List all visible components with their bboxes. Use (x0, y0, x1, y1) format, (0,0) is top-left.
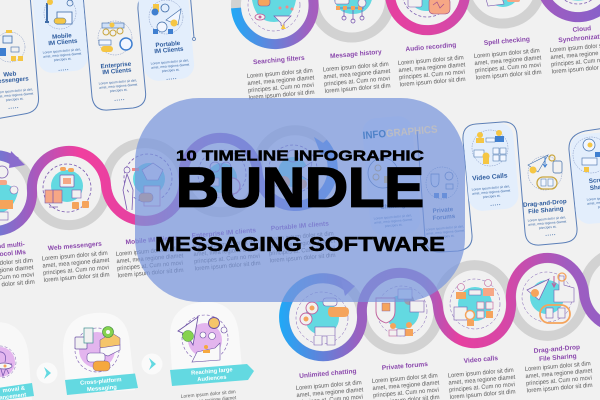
card text (471, 184, 511, 200)
heading: Chatting (380, 202, 406, 211)
icon: connector end dot (192, 38, 196, 40)
label: spam removal and enhancement (0, 383, 34, 400)
card: drag-and-drop file sharing (523, 155, 567, 237)
heading: Enterprise (100, 61, 132, 70)
label: drag-and-drop file sharing: amet, mea regione diamet (525, 367, 593, 380)
icon: web messengers (0, 30, 25, 62)
label: portable IM clients: Lorem ipsum dolor sit dim (268, 230, 334, 243)
card text: amet, mea regione diamet (99, 83, 138, 90)
card text (0, 87, 34, 103)
card text: amet, mea regione diamet (374, 218, 413, 225)
icon: drag-and-drop file sharing (528, 155, 562, 190)
heading: Portable (155, 40, 181, 49)
card text: amet, mea regione diamet (472, 189, 511, 196)
icon: spam removal (0, 346, 16, 378)
card text: principes at. (483, 194, 501, 199)
card: reaching large audiences (170, 302, 254, 400)
label: web messengers: principes at. Cum no movi (43, 264, 109, 277)
pagination dots: ••••• (58, 68, 69, 72)
heading: Video Calls (472, 172, 508, 183)
card text: Lorem ipsum dolor sit dim (181, 389, 236, 400)
icon: video calls (450, 279, 500, 329)
icon: cloud synchronization (553, 0, 600, 4)
label: spam removal and enhancement: moval & (2, 386, 25, 394)
pagination dots: ••••• (166, 77, 177, 81)
icon: private forums (376, 286, 427, 336)
subtitle: messaging software: MESSAGING SOFTWARE (155, 233, 445, 256)
icon: decentralized messengers (0, 166, 18, 220)
card text: Lorem ipsum dolor sit dim, (42, 47, 81, 55)
label: audio recording: principes at. Cum no movi (399, 69, 465, 81)
ribbon: bottom timeline (284, 258, 600, 356)
card: video calls (462, 122, 520, 212)
label: unlimited chatting: Unlimited chatting (299, 368, 357, 380)
label: mobile IM clients: principes at. Cum no movi (117, 260, 183, 272)
label: message history: lorem ipsum dolor sit dim (324, 82, 391, 95)
icon: unlimited chatting (368, 158, 398, 188)
icon: video calls (472, 130, 508, 166)
card text (425, 224, 465, 240)
label: unlimited chatting (296, 368, 364, 400)
label: video calls: amet, mea regione diamet (448, 374, 516, 387)
label: message history (323, 49, 392, 95)
icon: reaching large audiences (178, 315, 228, 362)
label: spell checking: Spell checking (484, 36, 530, 47)
card: unlimited chatting (361, 115, 421, 237)
card text: Lorem ipsum dolor sit dim, (527, 215, 566, 223)
label: unlimited chatting: Lorem ipsum dolor sit dim (296, 379, 362, 392)
icon: portable IM clients (149, 0, 183, 34)
label: searching filters: lorem ipsum dolor sit dim (248, 89, 315, 102)
label: reaching large audiences: Reaching large (191, 367, 234, 377)
label: web messengers: amet, mea regione diamet (42, 257, 110, 270)
card text: Lorem ipsum dolor sit dim, (471, 184, 510, 192)
label: drag-and-drop file sharing: File Sharing (539, 353, 577, 363)
label: web messengers: Web messengers (48, 241, 102, 252)
label: searching filters: Lorem ipsum dolor sit dim (247, 67, 313, 80)
label: spell checking (474, 36, 543, 82)
card text: principes at. (539, 225, 557, 230)
panel: bottom left arch cards (0, 302, 254, 400)
card text: amet, mea regione diamet (426, 229, 465, 236)
label: mobile IM clients: Mobile IM clients (125, 235, 179, 246)
label: drag-and-drop file sharing: principes at. Cum no movi (526, 375, 592, 387)
label: enterprise IM clients (191, 227, 262, 273)
label: message history: Message history (330, 49, 382, 60)
icon: unlimited chatting (296, 292, 349, 345)
card: mobile IM clients (31, 0, 89, 74)
arrow: next step circle 1 (36, 362, 58, 384)
card text: principes at. (110, 88, 128, 93)
card: private forums: Forums (432, 213, 456, 222)
label: private forums: Private forums (382, 361, 428, 372)
card: spam removal (0, 322, 34, 400)
label: cross-platform messaging: Cross-platform (80, 377, 122, 387)
label: cloud synchronization: Cloud (572, 25, 591, 34)
label: web messengers (42, 241, 111, 284)
icon: cross-platform messaging (75, 326, 120, 372)
card text: principes at. (54, 57, 72, 62)
icon: spell checking (484, 0, 520, 7)
label: mobile IM clients: lorem ipsum dolor sit dim (117, 267, 184, 280)
label: reaching large audiences: Audiences (197, 375, 227, 383)
heading: Web (3, 70, 17, 79)
card text (42, 47, 82, 63)
label: enterprise IM clients: amet, mea regione diamet (193, 245, 261, 258)
label: portable IM clients: lorem ipsum dolor sit dim (269, 252, 336, 265)
label: web messengers: lorem ipsum dolor sit dim (43, 271, 110, 284)
pagination dots: ••••• (8, 106, 19, 110)
icon: enterprise IM clients (98, 21, 132, 55)
card text: Lorem ipsum dolor sit dim, (98, 78, 137, 86)
label: spell checking: lorem ipsum dolor sit dim (475, 69, 542, 82)
outline: connector line top left (0, 0, 194, 120)
card text: principes at. (6, 97, 24, 102)
icon: message history (333, 0, 373, 23)
label: private forums (372, 361, 441, 400)
label: message history: amet, mea regione diamet (323, 68, 391, 81)
icon: mobile IM clients (44, 0, 76, 29)
card text (527, 215, 567, 231)
label: video calls: Lorem ipsum dolor sit dim (448, 367, 514, 379)
title: 10 timeline infographic: 10 TIMELINE INFOGRAPHIC (176, 148, 424, 164)
panel: central rounded blob (135, 98, 465, 302)
title: bundle: BUNDLE (176, 156, 424, 218)
icon: portable IM clients (269, 145, 317, 193)
label: portable IM clients: Portable IM clients (271, 220, 330, 233)
label: mobile IM clients: amet, mea regione diamet (116, 252, 184, 265)
label: searching filters: Searching filters (253, 55, 305, 66)
icon: screen sharing (573, 137, 600, 173)
panel: vertical card serpentine top left (0, 0, 196, 120)
label: private forums: principes at. Cum no movi (373, 387, 439, 399)
label: spell checking: Lorem ipsum dolor sit dim (474, 47, 540, 60)
card: portable IM clients: IM Clients (154, 46, 184, 55)
ribbon: top timeline (236, 0, 600, 44)
card: enterprise IM clients (98, 21, 138, 102)
card: web messengers (0, 30, 34, 110)
label: private forums: amet, mea regione diamet (372, 379, 440, 392)
arrow: middle timeline start (9, 151, 25, 168)
label: audio recording (398, 42, 467, 89)
label: decentralized multi-protocol IMs (0, 241, 35, 292)
panel: vertical cards right (361, 115, 600, 252)
arrow: next step circle 2 (142, 354, 162, 374)
label: enterprise IM clients: principes at. Cum no movi (194, 253, 260, 265)
card text: Lorem ipsum dolor sit dim, (150, 58, 189, 66)
label: portable IM clients: principes at. Cum no movi (269, 245, 335, 257)
card text: Lorem ipsum dolor sit dim, (425, 224, 464, 232)
card: enterprise IM clients: IM Clients (102, 67, 132, 76)
card text (98, 78, 138, 94)
card: drag-and-drop file sharing: File Sharing (528, 205, 564, 216)
card text: principes at. (162, 68, 180, 73)
label: message history: Lorem ipsum dolor sit dim (323, 61, 389, 73)
card: private forums (425, 167, 465, 240)
card text: Lorem ipsum dolor sit dim, (373, 213, 412, 221)
icon: web messengers (43, 164, 91, 212)
pagination dots: ••••• (114, 98, 125, 102)
card text: principes at. (437, 234, 455, 239)
label: enterprise IM clients: Lorem ipsum dolor sit dim (193, 238, 259, 251)
heading: Mobile (52, 32, 72, 41)
label: video calls (448, 355, 517, 400)
label: audio recording: Audio recording (405, 42, 457, 53)
label: cross-platform messaging: Messaging (87, 385, 118, 393)
panel: top timeline (236, 0, 600, 102)
arrow: middle timeline end (314, 137, 334, 155)
pagination dots: ••••• (545, 233, 556, 237)
label: drag-and-drop file sharing: Drag-and-Drop (533, 344, 580, 355)
card text (586, 194, 600, 210)
icon: drag-and-drop file sharing (522, 272, 574, 323)
arrow: bottom timeline start (341, 279, 355, 296)
label: mobile IM clients: Lorem ipsum dolor sit dim (116, 245, 182, 258)
label: drag-and-drop file sharing: Lorem ipsum dolor sit dim (525, 360, 591, 373)
card text (373, 213, 413, 229)
card: mobile IM clients: IM Clients (48, 38, 78, 47)
pagination dots: ••••• (490, 203, 501, 207)
logo: infographics wordmark: INFOGRAPHICS (362, 123, 438, 142)
label: audio recording: lorem ipsum dolor sit dim (399, 76, 466, 89)
card text: amet, mea regione diamet (43, 52, 82, 59)
card text: amet, mea regione diamet (528, 220, 567, 227)
panel: middle timeline (0, 130, 337, 292)
card text: principes at. (385, 223, 403, 228)
label: reaching large audiences (170, 364, 254, 386)
card text (150, 58, 190, 74)
label: portable IM clients (268, 220, 337, 265)
label: video calls: principes at. Cum no movi (449, 381, 515, 394)
label: web messengers: Lorem ipsum dolor sit dim (42, 250, 108, 262)
label: drag-and-drop file sharing: lorem ipsum dolor sit dim (526, 382, 593, 395)
label: cloud synchronization (550, 25, 600, 76)
label: searching filters (247, 55, 316, 102)
outline: right serpentine line (417, 122, 600, 252)
label: cross-platform messaging (65, 374, 138, 395)
label: enterprise IM clients: Enterprise IM clients (191, 227, 257, 240)
panel: bottom timeline (284, 252, 600, 400)
card: cross-platform messaging (63, 313, 138, 395)
label: video calls: Video calls (463, 355, 499, 365)
ribbon: middle timeline (0, 138, 333, 231)
icon: enterprise IM clients (198, 150, 246, 198)
label: spell checking: amet, mea regione diamet (474, 54, 542, 67)
icon: searching filters (248, 0, 300, 31)
label: searching filters: principes at. Cum no movi (248, 82, 314, 94)
card: portable IM clients (137, 0, 195, 82)
label: private forums: Lorem ipsum dolor sit dim (372, 372, 438, 385)
label: drag-and-drop file sharing (525, 344, 594, 395)
label: portable IM clients: amet, mea regione diamet (268, 237, 336, 250)
icon: mobile IM clients (123, 154, 172, 210)
icon: audio recording (402, 0, 452, 17)
label: unlimited chatting: amet, mea regione diamet (296, 386, 364, 399)
label: audio recording: amet, mea regione diamet (398, 61, 466, 74)
icon: private forums (426, 167, 458, 199)
heading: Drag-and-Drop (523, 198, 567, 209)
label: enterprise IM clients: lorem ipsum dolor sit dim (194, 260, 261, 273)
card: screen sharing (569, 130, 600, 225)
label: audio recording: Lorem ipsum dolor sit dim (398, 54, 464, 67)
label: searching filters: amet, mea regione diamet (247, 74, 315, 87)
label: message history: principes at. Cum no movi (324, 75, 390, 88)
label: mobile IM clients (116, 235, 185, 280)
heading: Private (432, 206, 454, 215)
label: spell checking: principes at. Cum no movi (475, 62, 541, 74)
card text: amet, mea regione diamet (151, 63, 190, 70)
